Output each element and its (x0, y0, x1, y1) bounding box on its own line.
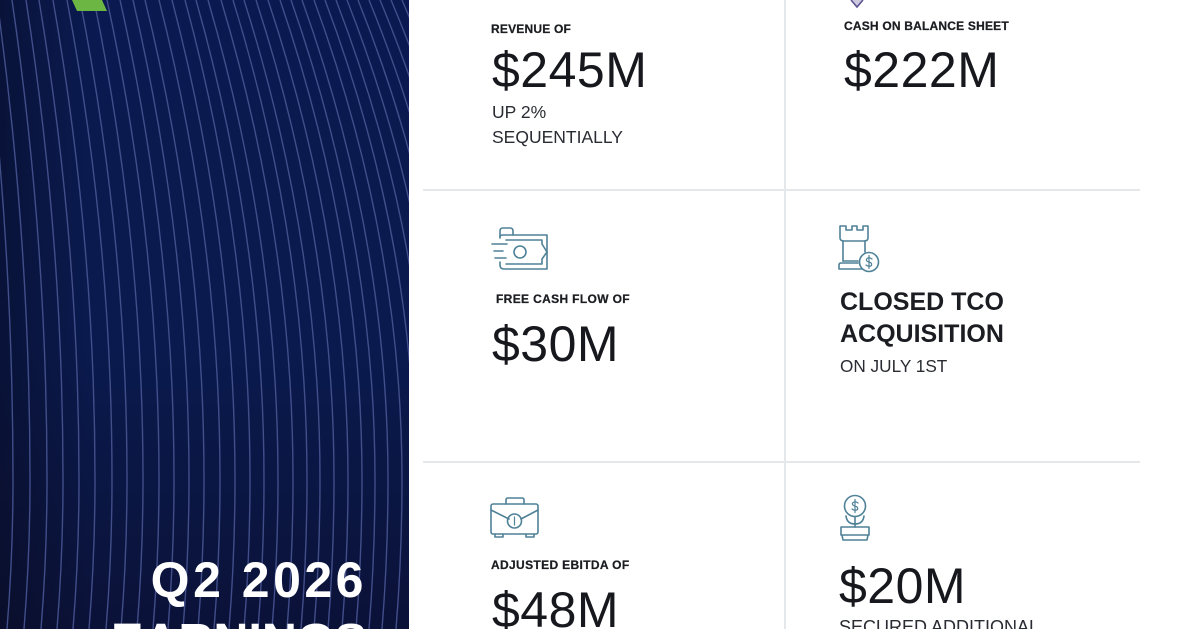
value: $30M: $30M (492, 316, 619, 372)
panel: navy left panel (0, 0, 409, 629)
label: cash on balance sheet: CASH ON BALANCE SHEET (844, 19, 1009, 33)
panel: secured additional (839, 494, 1039, 629)
text: up 2% sequentially: UP 2% (492, 102, 546, 122)
text: up 2% sequentially: SEQUENTIALLY (492, 126, 623, 146)
text: on July 1st: ON JULY 1ST (840, 356, 947, 376)
panel: revenue (491, 22, 647, 146)
grid divider: vertical (784, 0, 786, 629)
title: Q2 2026 Earnings (111, 552, 367, 629)
icon: flying banknote (491, 227, 548, 270)
icon: briefcase with dollar (490, 497, 539, 538)
panel: cash on balance sheet (844, 0, 1009, 98)
icon: cash fragment (850, 0, 864, 8)
curved line pattern (0, 0, 409, 629)
heading: closed TCO acquisition: ACQUISITION (840, 320, 1004, 348)
value: $222M: $222M (844, 42, 999, 98)
heading: closed TCO acquisition: CLOSED TCO (840, 288, 1004, 316)
panel: free cash flow (491, 227, 630, 372)
panel: TCO acquisition (838, 225, 1004, 376)
logo fragment: green shape (72, 0, 107, 11)
icon: coin plant in pot (840, 494, 870, 541)
label: revenue of: REVENUE OF (491, 22, 571, 36)
value: $20M: $20M (839, 558, 966, 614)
heading: closed TCO acquisition (840, 288, 1004, 348)
title: Q2 2026 Earnings: Q2 2026 (151, 552, 367, 608)
text: up 2% sequentially (492, 102, 623, 146)
icon: chess rook with coin (838, 225, 880, 272)
grid divider: horizontal bottom (423, 461, 1140, 463)
panel: adjusted EBITDA (490, 497, 630, 629)
label: free cash flow of: FREE CASH FLOW OF (496, 292, 630, 306)
value: $245M: $245M (492, 42, 647, 98)
grid divider: horizontal top (423, 189, 1140, 191)
label: adjusted EBITDA of: ADJUSTED EBITDA OF (491, 558, 630, 572)
